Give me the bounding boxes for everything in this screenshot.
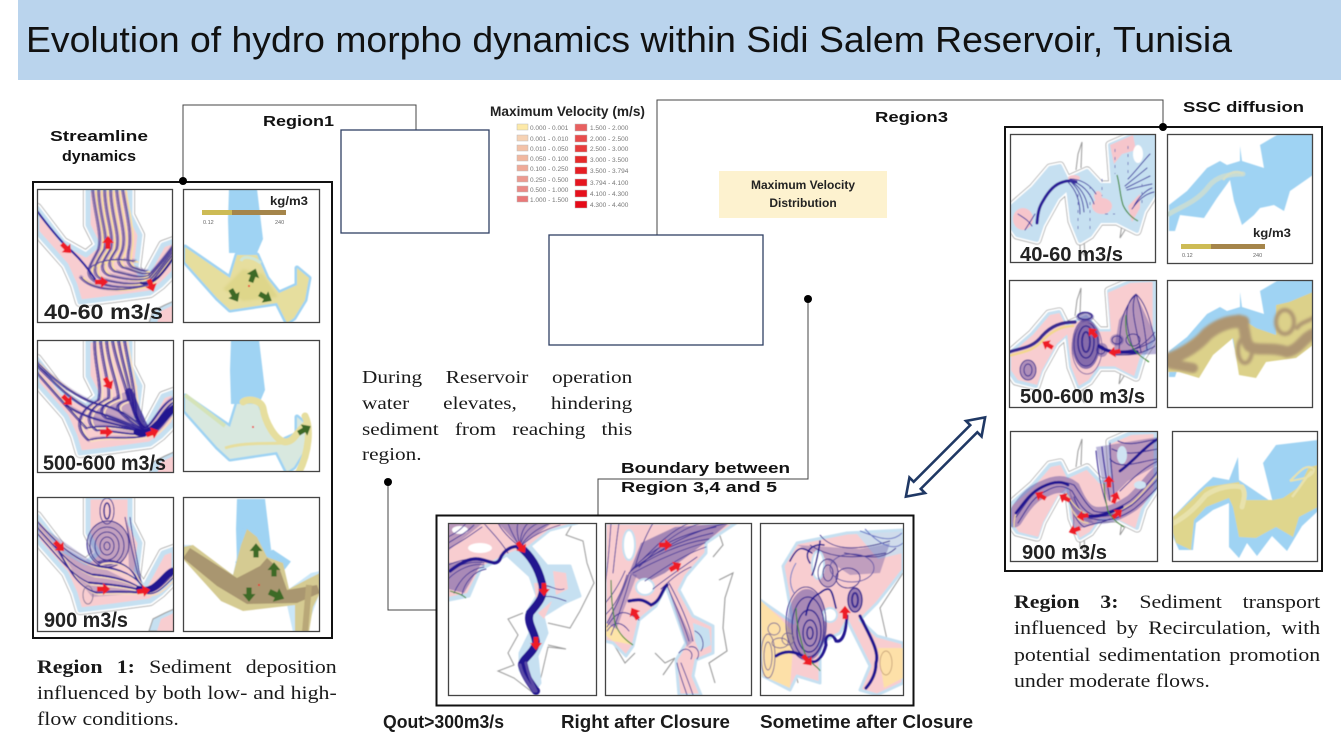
- map: region 3 streamlines 40-60: 40-60 m3/s: [1020, 244, 1123, 266]
- text: region 3 summary: [1014, 593, 1320, 692]
- dot: boundary connector: [804, 295, 812, 303]
- map: region 3 SSC 40-60 with colour bar: 0.12: [1182, 253, 1193, 259]
- legend: maximum velocity: 4.300 - 4.400: [590, 202, 629, 209]
- text: reservoir operation note: During Reservoir operation: [362, 367, 632, 387]
- map: region 3 streamlines 40-60: [1010, 134, 1156, 266]
- map: sometime after closure: [760, 524, 904, 696]
- heading: streamline dynamics: [50, 128, 148, 165]
- map: region 3 streamlines 900: 900 m3/s: [1022, 542, 1107, 564]
- map: region 1 streamlines 40-60: [37, 189, 177, 324]
- map: region 1 SSC 900: [183, 498, 320, 632]
- legend: maximum velocity: 1.500 - 2.000: [590, 125, 629, 132]
- colour bar: region 1: [202, 196, 308, 226]
- heading: boundary between regions: Region 3,4 and 5: [621, 479, 777, 496]
- heading: region 1: Region1: [263, 113, 334, 130]
- connector: reservoir operation note: [388, 482, 436, 610]
- map: region 1 streamlines 40-60: 40-60 m3/s: [44, 301, 163, 324]
- map: region 1 streamlines 900: [35, 497, 176, 632]
- dot: region 1: [179, 177, 187, 185]
- text: reservoir operation note: water elevates, hindering: [362, 393, 632, 413]
- heading: region 3: Region3: [875, 109, 948, 126]
- map: region 1 streamlines 500-600: 500-600 m3/s: [43, 452, 166, 475]
- title banner: Evolution of hydro morpho dynamics within Sidi Salem Reservoir, Tunisia: [26, 19, 1233, 60]
- text: region 1 summary: [37, 658, 337, 730]
- heading: streamline dynamics: Streamline: [50, 128, 148, 145]
- legend: maximum velocity: 0.001 - 0.010: [530, 136, 569, 143]
- heading: streamline dynamics: dynamics: [62, 148, 136, 165]
- empty map box: region 3: [549, 235, 763, 345]
- legend: maximum velocity: 3.500 - 3.794: [590, 168, 629, 175]
- legend: maximum velocity: 0.050 - 0.100: [530, 156, 569, 163]
- text: region 3 summary: influenced by Recirculation, with: [1014, 619, 1320, 639]
- legend: maximum velocity: [490, 104, 645, 209]
- map: region 3 SSC 40-60 with colour bar: [1168, 134, 1313, 264]
- legend: maximum velocity: 0.100 - 0.250: [530, 166, 569, 173]
- map: discharge above 300 m3/s: [448, 523, 596, 696]
- map: region 1 SSC 40-60 with colour bar: [184, 189, 320, 323]
- legend: maximum velocity: 3.000 - 3.500: [590, 157, 629, 164]
- map: right after closure: [605, 523, 752, 696]
- callout: maximum velocity distribution: Distribution: [769, 196, 837, 210]
- colour bar: region 1: 0.12: [203, 220, 214, 226]
- dot: operation note connector: [384, 478, 392, 486]
- label: sometime after closure: Sometime after Closure: [760, 712, 973, 732]
- callout: maximum velocity distribution: [719, 171, 887, 218]
- text: region 3 summary: Region 3: Sediment transport: [1014, 593, 1320, 613]
- colour bar: region 1: kg/m3: [270, 196, 308, 208]
- dot: region 3: [1159, 123, 1167, 131]
- connector: region 3: [657, 100, 1163, 235]
- text: reservoir operation note: region.: [362, 444, 422, 464]
- legend: maximum velocity: 2.000 - 2.500: [590, 136, 629, 143]
- map: region 3 streamlines 500-600: [1009, 280, 1157, 408]
- panel: region 1 frame: [33, 182, 332, 638]
- label: Qout above 300 m3/s: Qout>300m3/s: [383, 712, 504, 732]
- text: region 1 summary: influenced by both low- and high-: [37, 684, 337, 704]
- legend: maximum velocity: 0.500 - 1.000: [530, 187, 569, 194]
- heading: SSC diffusion: SSC diffusion: [1183, 99, 1304, 116]
- map: region 3 SSC 900: [1172, 432, 1318, 562]
- panel: boundary between regions frame: [436, 516, 914, 706]
- map: region 1 streamlines 900: 900 m3/s: [44, 609, 128, 632]
- map: region 1 streamlines 500-600: [35, 340, 177, 475]
- map: region 3 streamlines 900: [1010, 431, 1158, 564]
- panel: region 3 frame: [1005, 127, 1322, 571]
- connector: region 1: [183, 105, 416, 181]
- colour bar: region 1: 240: [275, 220, 284, 226]
- label: right after closure: Right after Closure: [561, 712, 730, 732]
- empty map box: region 1: [341, 130, 489, 233]
- legend: maximum velocity: 0.010 - 0.050: [530, 146, 569, 153]
- legend: maximum velocity: 0.000 - 0.001: [530, 125, 569, 132]
- map: region 3 SSC 40-60 with colour bar: kg/m3: [1253, 228, 1291, 240]
- text: region 1 summary: Region 1: Sediment deposition: [37, 658, 337, 678]
- map: region 1 SSC 500-600: [184, 340, 320, 472]
- heading: boundary between regions: [621, 460, 790, 496]
- map: region 3 SSC 40-60 with colour bar: 240: [1253, 253, 1262, 259]
- map: region 3 SSC 500-600: [1167, 280, 1313, 408]
- legend: maximum velocity: 4.100 - 4.300: [590, 191, 629, 198]
- text: region 3 summary: under moderate flows.: [1014, 672, 1210, 692]
- title banner: [18, 0, 1341, 80]
- legend: maximum velocity: 0.250 - 0.500: [530, 177, 569, 184]
- connector: boundary region: [598, 299, 808, 515]
- legend: maximum velocity: 2.500 - 3.000: [590, 146, 629, 153]
- text: region 3 summary: potential sedimentation promotion: [1014, 646, 1320, 666]
- heading: boundary between regions: Boundary between: [621, 460, 790, 477]
- legend: maximum velocity: Maximum Velocity (m/s): [490, 104, 645, 119]
- map: region 3 streamlines 500-600: 500-600 m3/s: [1020, 386, 1145, 408]
- legend: maximum velocity: 1.000 - 1.500: [530, 197, 569, 204]
- legend: maximum velocity: 3.794 - 4.100: [590, 180, 629, 187]
- arrow: double-headed link between region 3 and boundary: [898, 410, 993, 504]
- text: region 1 summary: flow conditions.: [37, 710, 179, 730]
- callout: maximum velocity distribution: Maximum Velocity: [751, 178, 855, 192]
- text: reservoir operation note: [362, 367, 632, 464]
- text: reservoir operation note: sediment from reaching this: [362, 419, 632, 439]
